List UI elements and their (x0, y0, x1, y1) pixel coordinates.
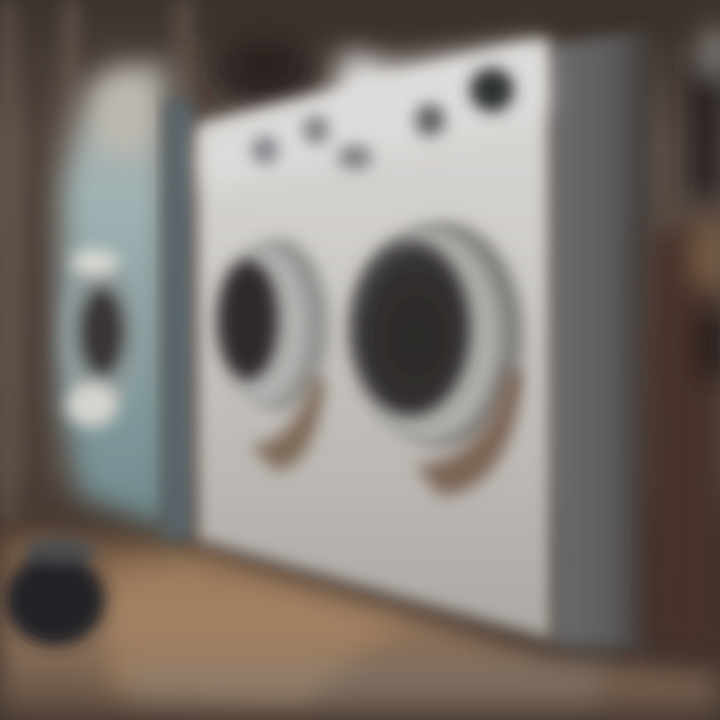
control panel (205, 42, 545, 185)
floor reflection (130, 660, 600, 705)
left machine divider strip (164, 100, 192, 540)
large door opening (350, 240, 470, 416)
brown cabinet (645, 26, 720, 660)
knob: small (303, 116, 329, 144)
large door crescent (415, 370, 522, 495)
knob: left (251, 136, 279, 164)
left machine door (62, 250, 138, 427)
small door (216, 240, 328, 470)
top dark band (200, 0, 720, 102)
floor (0, 530, 720, 720)
wall stripes (0, 0, 198, 520)
dark object on floor (5, 538, 105, 646)
left machine drum (78, 286, 126, 378)
large door (349, 223, 523, 495)
small door opening (218, 260, 278, 380)
knob: medium (415, 104, 445, 136)
main machine front (197, 38, 552, 640)
left machine (60, 60, 170, 530)
machine side panel (552, 30, 650, 650)
left machine door ring (62, 257, 138, 413)
knob: large dark (470, 68, 514, 112)
knob: centre (338, 145, 372, 169)
small door ring (232, 240, 328, 410)
small door crescent (250, 375, 325, 470)
large door ring (367, 223, 523, 447)
